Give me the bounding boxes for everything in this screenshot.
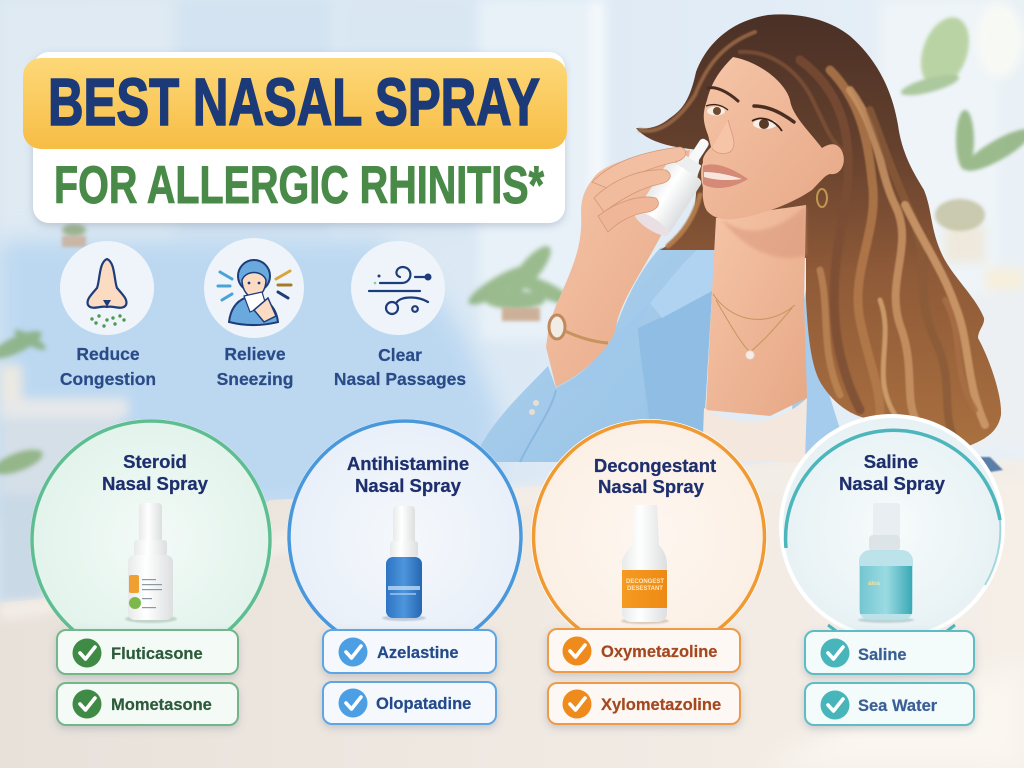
- necklace: [713, 294, 795, 360]
- option: azelastine: Azelastine: [377, 644, 459, 662]
- title banner: FOR ALLERGIC RHINITIS*: [54, 156, 544, 215]
- panel: decongestant nasal spray: [532, 420, 766, 724]
- blue wall panel: [0, 240, 500, 520]
- bottle: [382, 506, 426, 621]
- heading: Nasal Spray: [598, 476, 705, 497]
- label: Relieve: [224, 344, 286, 364]
- fingers: [592, 147, 686, 232]
- forearm and hand: [546, 150, 690, 387]
- heading: Nasal Spray: [102, 473, 209, 494]
- hair back: [636, 14, 1001, 447]
- option: sea water: Sea Water: [858, 697, 938, 715]
- icon: nose: [60, 241, 154, 335]
- heading: Antihistamine: [347, 453, 469, 474]
- panel: steroid nasal spray: [31, 420, 271, 725]
- bottle: [621, 505, 669, 624]
- icon: airflow: [351, 241, 445, 335]
- white top: [702, 398, 807, 462]
- heading: Saline: [864, 451, 918, 472]
- neck shadow: [722, 205, 806, 258]
- option: azelastine: [323, 630, 496, 673]
- option: fluticasone: Fluticasone: [111, 645, 203, 663]
- benefit: clear nasal passages: Nasal Passages: [334, 369, 466, 389]
- bottle: DECONGEST: [626, 579, 664, 585]
- option: olopatadine: Olopatadine: [376, 695, 471, 713]
- option: mometasone: Mometasone: [111, 696, 212, 714]
- heading: Decongestant: [594, 455, 716, 476]
- benefit: clear nasal passages: [334, 241, 466, 389]
- benefit: relieve sneezing: [204, 238, 304, 389]
- circle: [781, 416, 1003, 638]
- spray bottle in hand: [631, 129, 723, 240]
- option: mometasone: [57, 683, 238, 725]
- option: olopatadine: [323, 682, 496, 724]
- watch: [549, 315, 608, 343]
- blazer: [478, 228, 852, 462]
- woman with nasal spray: [478, 14, 1001, 462]
- face: [701, 57, 844, 219]
- option: saline: [805, 631, 974, 674]
- option: xylometazoline: [548, 683, 740, 724]
- right shelf: [945, 225, 1024, 445]
- bottle: [858, 503, 914, 623]
- option: oxymetazoline: [548, 629, 740, 672]
- panel: antihistamine nasal spray: [288, 420, 522, 724]
- bottle: aloa: [868, 581, 881, 587]
- option: xylometazoline: Xylometazoline: [601, 696, 721, 714]
- heading: Nasal Spray: [355, 475, 462, 496]
- option: oxymetazoline: Oxymetazoline: [601, 643, 717, 661]
- option: fluticasone: [57, 630, 238, 674]
- bottle: DESESTANT: [627, 586, 663, 592]
- plants: [0, 11, 1024, 479]
- circle: [532, 420, 766, 654]
- option: sea water: [805, 683, 974, 725]
- option: saline: Saline: [858, 646, 907, 664]
- cuff buttons: [529, 400, 539, 415]
- panel: saline nasal spray: [781, 416, 1003, 725]
- title banner: [23, 52, 567, 223]
- left shelf: [0, 365, 128, 605]
- title banner: BEST NASAL SPRAY: [48, 65, 540, 140]
- neck and chest: [706, 205, 807, 416]
- benefit: reduce congestion: Congestion: [60, 369, 156, 389]
- circle: [288, 420, 522, 654]
- label: Reduce: [76, 344, 140, 364]
- hair strands: [640, 32, 985, 440]
- circle: [30, 419, 272, 630]
- heading: Nasal Spray: [839, 473, 946, 494]
- benefit: relieve sneezing: Sneezing: [217, 369, 293, 389]
- benefit: reduce congestion: [60, 241, 156, 389]
- heading: Steroid: [123, 451, 187, 472]
- label: Clear: [378, 345, 422, 365]
- bottle: [125, 503, 177, 623]
- icon: sneezing person: [204, 238, 304, 338]
- table: [0, 460, 1024, 768]
- earring: [817, 189, 827, 207]
- phone on table: [977, 457, 1003, 472]
- face details: [703, 88, 794, 188]
